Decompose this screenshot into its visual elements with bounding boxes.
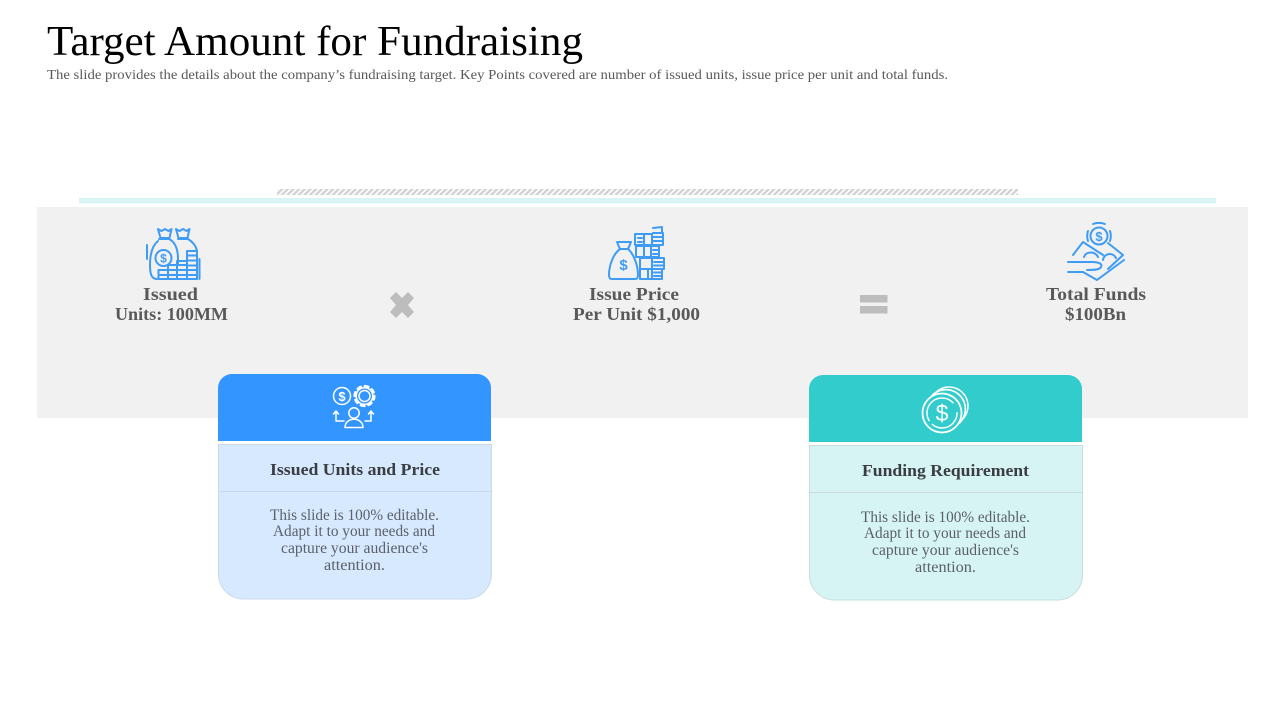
label: issued units [115, 284, 228, 324]
card body: light blue [218, 444, 492, 599]
card text: capture your audience's [872, 542, 1019, 559]
card text [861, 509, 1030, 576]
panel: grey equation band [37, 207, 1248, 418]
card text: attention. [915, 559, 976, 576]
card heading: Issued Units and Price [270, 460, 440, 479]
icon: money bags and coins [147, 229, 200, 279]
label: issue price: Per Unit $1,000 [573, 304, 700, 324]
card header: teal [809, 375, 1082, 442]
subtitle: The slide provides the details about the company’s fundraising target. Key Points covered are number of issued units, issue price per unit and total funds. [47, 68, 948, 83]
icon: coin stack: $ [936, 400, 949, 426]
card heading: Funding Requirement [862, 461, 1030, 480]
card text [270, 507, 439, 574]
panel: funding requirement [809, 375, 1082, 600]
icon: coin stack [922, 387, 968, 432]
icon: money bags and coins: $ [160, 252, 167, 266]
card header: blue [218, 374, 491, 441]
card text: Adapt it to your needs and [273, 523, 435, 540]
icon: hand holding cash and coin [1068, 223, 1124, 280]
label: total funds: $100Bn [1065, 304, 1126, 324]
icon: dollar, gear and person [334, 386, 374, 428]
icon: dollar, gear and person: $ [338, 389, 346, 404]
card text: Adapt it to your needs and [864, 525, 1026, 542]
card text: attention. [324, 557, 385, 574]
card text: This slide is 100% editable. [270, 507, 439, 524]
label: total funds: Total Funds [1046, 284, 1146, 304]
icon: equals sign [860, 295, 888, 314]
card text: capture your audience's [281, 540, 428, 557]
label: issue price [573, 284, 700, 324]
label: total funds [1046, 284, 1146, 324]
icon: money bag and cash stacks: $ [619, 257, 628, 274]
title: Target Amount for Fundraising [47, 19, 583, 65]
icon: multiply sign [390, 292, 414, 318]
hatched strip [277, 189, 1018, 195]
label: issued units: Units: 100MM [115, 304, 228, 324]
teal rule [79, 198, 1216, 204]
icon: hand holding cash and coin: $ [1095, 229, 1103, 244]
label: issue price: Issue Price [589, 284, 679, 304]
panel: issued units and price [218, 374, 492, 599]
card text: This slide is 100% editable. [861, 509, 1030, 526]
card body: light teal [810, 446, 1082, 600]
label: issued units: Issued [143, 284, 198, 304]
icon: money bag and cash stacks [609, 227, 664, 279]
